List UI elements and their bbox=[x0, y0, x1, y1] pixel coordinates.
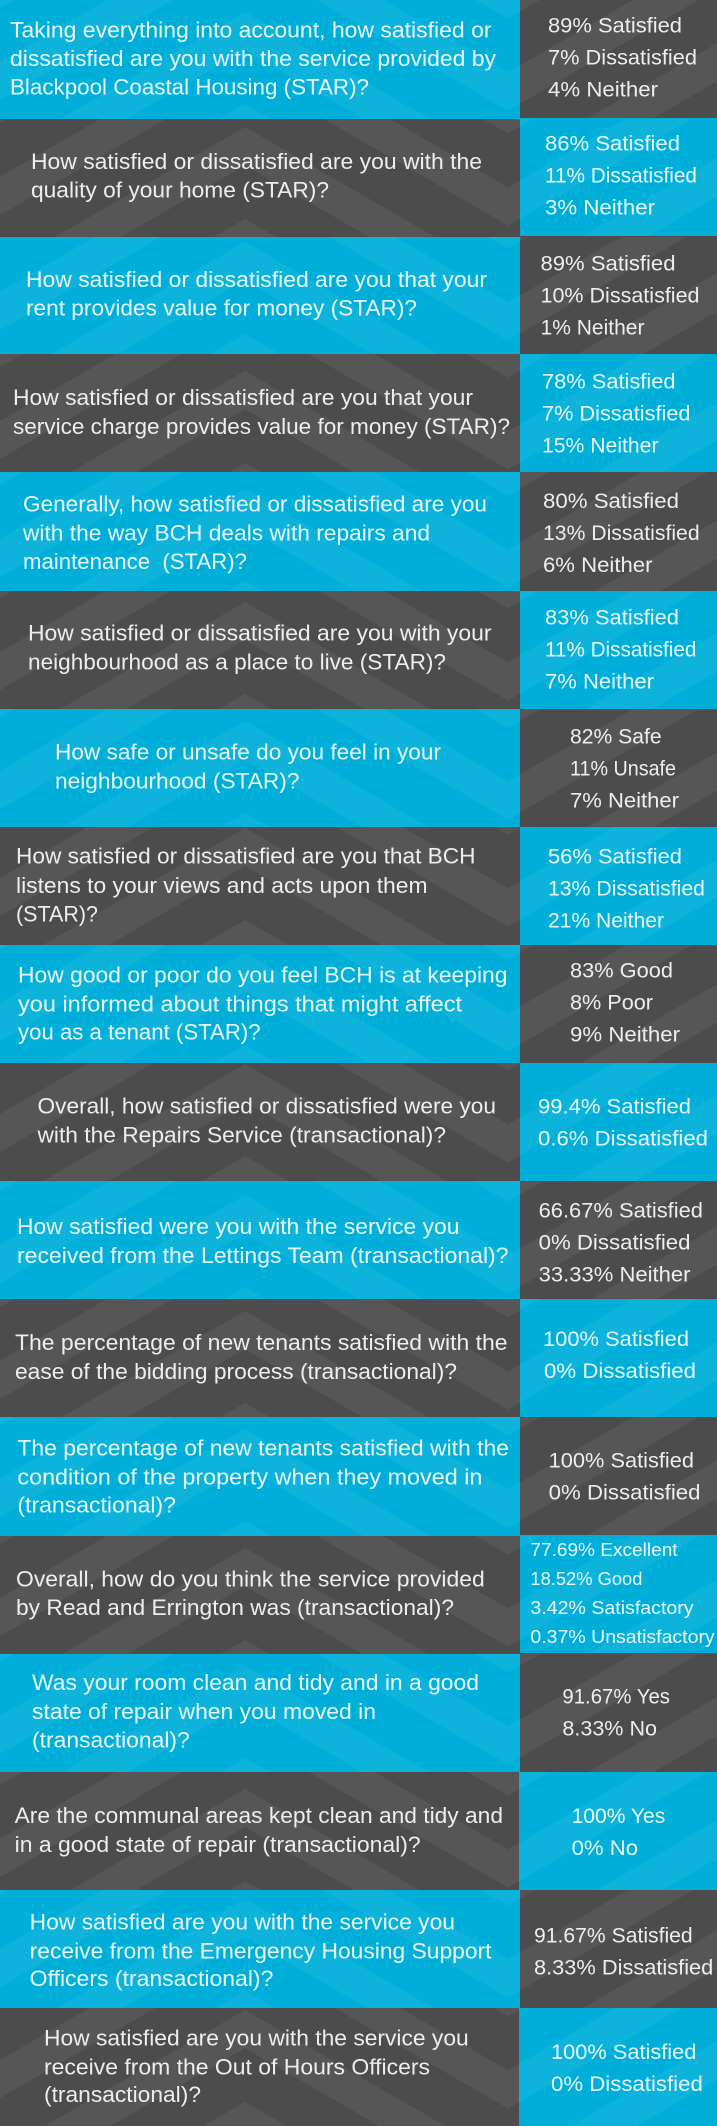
answer percentages: 0% Dissatisfied bbox=[551, 2073, 703, 2096]
question text bbox=[32, 1670, 479, 1752]
answer percentages bbox=[570, 960, 680, 1047]
answer percentages: 80% Satisfied bbox=[543, 490, 679, 513]
row 11: lettings team bbox=[0, 1181, 717, 1299]
question text: ease of the bidding process (transactional)? bbox=[15, 1359, 457, 1384]
question text: (transactional)? bbox=[44, 2082, 201, 2107]
question text: you as a tenant (STAR)? bbox=[18, 1020, 261, 1045]
question text: How satisfied are you with the service you bbox=[30, 1909, 455, 1934]
answer percentages: 18.52% Good bbox=[530, 1569, 642, 1589]
question text: Was your room clean and tidy and in a good bbox=[32, 1670, 479, 1695]
question text bbox=[44, 2025, 469, 2107]
answer percentages: 7% Neither bbox=[545, 670, 654, 693]
question text bbox=[22, 492, 487, 574]
answer percentages bbox=[545, 606, 696, 693]
row 14: Read and Errington service bbox=[0, 1535, 717, 1654]
answer percentages: 13% Dissatisfied bbox=[548, 878, 705, 901]
answer percentages: 100% Satisfied bbox=[543, 1328, 689, 1351]
question text: with the way BCH deals with repairs and bbox=[22, 521, 430, 546]
question text: listens to your views and acts upon them bbox=[16, 873, 428, 898]
answer percentages: 21% Neither bbox=[548, 910, 664, 933]
answer percentages: 33.33% Neither bbox=[539, 1264, 690, 1287]
question text: in a good state of repair (transactional)? bbox=[15, 1832, 421, 1857]
answer percentages: 100% Satisfied bbox=[549, 1450, 694, 1473]
question text: Overall, how satisfied or dissatisfied were you bbox=[38, 1094, 496, 1119]
answer percentages bbox=[538, 1096, 708, 1151]
question text: rent provides value for money (STAR)? bbox=[26, 296, 417, 321]
answer percentages bbox=[570, 725, 679, 813]
question text bbox=[26, 267, 488, 321]
answer percentages: 77.69% Excellent bbox=[530, 1540, 678, 1560]
question text: dissatisfied are you with the service provided by bbox=[10, 46, 497, 71]
question text: receive from the Emergency Housing Support bbox=[30, 1938, 492, 1963]
question text bbox=[36, 1094, 496, 1148]
answer percentages: 82% Safe bbox=[570, 725, 662, 748]
answer percentages: 8.33% Dissatisfied bbox=[534, 1957, 713, 1980]
row 3: rent value for money bbox=[0, 236, 717, 354]
question text bbox=[16, 1566, 485, 1620]
answer percentages: 3% Neither bbox=[545, 197, 655, 220]
question text: state of repair when you moved in bbox=[32, 1699, 376, 1724]
answer percentages: 7% Neither bbox=[570, 790, 679, 813]
question text bbox=[17, 1214, 508, 1268]
row 9: keeping tenants informed bbox=[0, 945, 717, 1063]
answer percentages bbox=[562, 1686, 670, 1741]
row 2: quality of home bbox=[0, 118, 717, 237]
answer percentages: 89% Satisfied bbox=[548, 15, 682, 38]
answer percentages bbox=[572, 1805, 665, 1860]
answer percentages: 11% Unsafe bbox=[570, 758, 676, 781]
answer percentages bbox=[548, 15, 697, 102]
answer percentages bbox=[530, 1540, 715, 1647]
answer percentages: 100% Satisfied bbox=[551, 2041, 696, 2064]
answer percentages: 83% Satisfied bbox=[545, 606, 679, 629]
question text: Officers (transactional)? bbox=[30, 1966, 273, 1991]
answer percentages: 4% Neither bbox=[548, 79, 658, 102]
question text bbox=[17, 1435, 509, 1518]
answer percentages bbox=[534, 1925, 713, 1980]
answer percentages: 66.67% Satisfied bbox=[539, 1200, 703, 1223]
answer percentages: 1% Neither bbox=[540, 317, 644, 340]
answer percentages bbox=[549, 1450, 700, 1505]
question text: The percentage of new tenants satisfied with the bbox=[17, 1435, 509, 1460]
answer percentages bbox=[543, 1328, 696, 1383]
question text: How satisfied or dissatisfied are you with your bbox=[28, 621, 492, 646]
answer percentages bbox=[543, 490, 700, 577]
question text bbox=[28, 621, 492, 675]
question text: neighbourhood (STAR)? bbox=[55, 769, 300, 794]
row 6: neighbourhood as a place to live bbox=[0, 591, 717, 709]
row 18: out of hours officers bbox=[0, 2008, 717, 2126]
answer percentages: 3.42% Satisfactory bbox=[530, 1598, 694, 1618]
row 7: safety in neighbourhood bbox=[0, 709, 717, 827]
question text: How satisfied or dissatisfied are you that your bbox=[13, 385, 474, 410]
question text: service charge provides value for money (STAR)? bbox=[13, 414, 510, 439]
answer percentages: 15% Neither bbox=[542, 435, 659, 458]
row 12: ease of bidding process bbox=[0, 1299, 717, 1417]
question text: How satisfied are you with the service you bbox=[44, 2025, 469, 2050]
answer percentages: 7% Dissatisfied bbox=[542, 403, 690, 426]
answer percentages bbox=[540, 253, 700, 340]
answer percentages: 9% Neither bbox=[570, 1024, 680, 1047]
row 15: room clean and tidy bbox=[0, 1653, 717, 1772]
answer percentages: 89% Satisfied bbox=[540, 253, 676, 276]
answer percentages: 8.33% No bbox=[562, 1718, 657, 1741]
question text: The percentage of new tenants satisfied with the bbox=[15, 1330, 508, 1355]
answer percentages bbox=[539, 1200, 703, 1287]
question text: Generally, how satisfied or dissatisfied are you bbox=[23, 492, 487, 517]
answer percentages: 91.67% Yes bbox=[562, 1686, 670, 1709]
question text: condition of the property when they moved in bbox=[17, 1464, 482, 1489]
answer percentages: 78% Satisfied bbox=[542, 371, 676, 394]
answer percentages: 83% Good bbox=[570, 960, 673, 983]
question text bbox=[13, 385, 510, 439]
answer percentages: 100% Yes bbox=[572, 1805, 665, 1828]
question text: How satisfied or dissatisfied are you that your bbox=[26, 267, 488, 292]
question text bbox=[15, 1803, 503, 1857]
question text: with the Repairs Service (transactional)? bbox=[36, 1123, 446, 1148]
question text: How satisfied or dissatisfied are you that BCH bbox=[16, 844, 476, 869]
answer percentages: 10% Dissatisfied bbox=[540, 285, 700, 308]
question text: Are the communal areas kept clean and tidy and bbox=[15, 1803, 503, 1828]
question text bbox=[55, 740, 441, 794]
question text: How satisfied were you with the service you bbox=[17, 1214, 459, 1239]
row 5: repairs and maintenance bbox=[0, 472, 717, 591]
answer percentages bbox=[548, 846, 705, 933]
question text bbox=[10, 17, 497, 99]
answer percentages: 91.67% Satisfied bbox=[534, 1925, 693, 1948]
question text: receive from the Out of Hours Officers bbox=[44, 2054, 430, 2079]
answer percentages: 56% Satisfied bbox=[548, 846, 682, 869]
question text bbox=[31, 149, 482, 203]
answer percentages: 0.37% Unsatisfactory bbox=[530, 1627, 715, 1647]
answer percentages: 0% Dissatisfied bbox=[539, 1232, 690, 1255]
answer percentages: 13% Dissatisfied bbox=[543, 522, 700, 545]
question text: Blackpool Coastal Housing (STAR)? bbox=[10, 74, 369, 99]
row 10: repairs service bbox=[0, 1063, 717, 1181]
answer percentages: 0% Dissatisfied bbox=[544, 1360, 696, 1383]
question text: (transactional)? bbox=[17, 1493, 176, 1518]
question text: maintenance (STAR)? bbox=[23, 549, 247, 574]
question text: (transactional)? bbox=[32, 1727, 190, 1752]
question text bbox=[15, 1330, 508, 1384]
question text: neighbourhood as a place to live (STAR)? bbox=[28, 650, 446, 675]
answer percentages: 0% Dissatisfied bbox=[549, 1482, 700, 1505]
question text: Taking everything into account, how satisfied or bbox=[10, 17, 492, 42]
question text: received from the Lettings Team (transactional)? bbox=[17, 1243, 508, 1268]
question text: Overall, how do you think the service provided bbox=[16, 1566, 485, 1591]
answer percentages bbox=[551, 2041, 703, 2096]
question text: you informed about things that might affect bbox=[18, 991, 463, 1016]
row 16: communal areas bbox=[0, 1772, 717, 1890]
answer percentages: 86% Satisfied bbox=[545, 133, 680, 156]
question text: (STAR)? bbox=[16, 901, 98, 926]
answer percentages: 99.4% Satisfied bbox=[538, 1096, 691, 1119]
answer percentages: 6% Neither bbox=[543, 554, 652, 577]
question text bbox=[18, 962, 508, 1045]
row 1: overall satisfaction bbox=[0, 0, 717, 119]
question text: How good or poor do you feel BCH is at keeping bbox=[18, 962, 508, 987]
answer percentages: 0.6% Dissatisfied bbox=[538, 1128, 708, 1151]
row 17: emergency housing support officers bbox=[0, 1890, 717, 2008]
answer percentages bbox=[542, 371, 690, 458]
question text: quality of your home (STAR)? bbox=[31, 178, 329, 203]
answer percentages: 7% Dissatisfied bbox=[548, 47, 697, 70]
row 4: service charge value for money bbox=[0, 354, 717, 472]
question text: by Read and Errington was (transactional)? bbox=[16, 1595, 454, 1620]
answer percentages: 11% Dissatisfied bbox=[545, 165, 697, 188]
answer percentages: 8% Poor bbox=[570, 992, 653, 1015]
question text: How safe or unsafe do you feel in your bbox=[55, 740, 441, 765]
question text bbox=[30, 1909, 492, 1991]
question text: How satisfied or dissatisfied are you with the bbox=[31, 149, 482, 174]
answer percentages: 11% Dissatisfied bbox=[545, 638, 696, 661]
row 13: condition of property bbox=[0, 1417, 717, 1536]
answer percentages: 0% No bbox=[572, 1837, 638, 1860]
question text bbox=[16, 844, 476, 926]
answer percentages bbox=[545, 133, 697, 220]
row 8: BCH listens to views bbox=[0, 827, 717, 945]
